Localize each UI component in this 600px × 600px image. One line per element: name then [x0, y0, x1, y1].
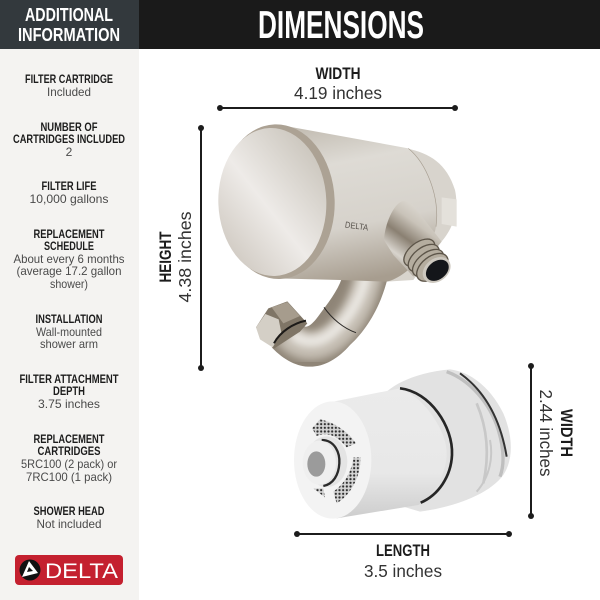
outlet: [384, 201, 442, 277]
spec: number of cartridges: [13, 120, 125, 159]
main cylinder: [333, 388, 447, 518]
dimension: height: 4.38 inches: [175, 211, 195, 302]
end face: [294, 401, 371, 519]
brand mark: DELTA: [344, 219, 369, 233]
sidebar heading: ADDITIONAL: [25, 5, 113, 25]
panel: additional information sidebar: [0, 0, 139, 600]
spec: replacement schedule: REPLACEMENT: [34, 227, 105, 241]
dimension: height: [157, 125, 204, 371]
spec: installation: [36, 312, 102, 351]
spec: number of cartridges: CARTRIDGES INCLUDED: [13, 132, 125, 146]
spec: replacement schedule: shower): [50, 277, 88, 291]
spec: filter life: [30, 179, 108, 206]
spec: replacement schedule: (average 17.2 gallon: [16, 264, 122, 278]
spec: filter attachment depth: FILTER ATTACHMENT: [20, 372, 119, 386]
nut: [256, 301, 307, 349]
product: filter cartridge: [294, 369, 511, 519]
o-ring: [400, 388, 452, 503]
title bar: dimensions: DIMENSIONS: [258, 4, 424, 47]
spec: installation: shower arm: [40, 337, 98, 351]
dimension: cartridge length: [294, 531, 512, 581]
spec: shower head: [34, 504, 105, 531]
perforated inlets: [312, 419, 361, 503]
sidebar heading: INFORMATION: [18, 25, 120, 45]
spec: filter attachment depth: [20, 372, 119, 411]
spec: filter cartridge: FILTER CARTRIDGE: [25, 72, 113, 86]
spec: replacement cartridges: REPLACEMENT: [34, 432, 105, 446]
center spout: [306, 436, 347, 487]
threads: [399, 234, 453, 287]
arm: [272, 280, 387, 367]
dimension: top width: WIDTH: [316, 65, 360, 83]
dimension: top width: 4.19 inches: [294, 83, 382, 103]
spec: replacement schedule: SCHEDULE: [44, 239, 94, 253]
dimension: cartridge width: 2.44 inches: [536, 390, 556, 477]
spec: replacement schedule: About every 6 months: [14, 252, 124, 266]
spec: number of cartridges: 2: [66, 145, 73, 159]
sidebar heading: [0, 0, 139, 49]
cap: [387, 148, 456, 282]
face: [216, 126, 329, 278]
spec: shower head: Not included: [36, 517, 102, 531]
dimension: cartridge length: 3.5 inches: [364, 561, 442, 581]
spec: filter cartridge: Included: [47, 85, 91, 99]
dimension: cartridge length: LENGTH: [376, 542, 430, 560]
outlet opening: [418, 252, 456, 288]
dimension: cartridge width: WIDTH: [557, 409, 575, 457]
spec: number of cartridges: NUMBER OF: [40, 120, 98, 134]
rim: [217, 122, 337, 281]
product: shower filter: [216, 122, 457, 377]
spec: replacement cartridges: 5RC100 (2 pack) or: [21, 457, 117, 471]
dimension: top width: [217, 65, 458, 111]
logo: Delta: DELTA: [45, 560, 118, 583]
spec: installation: Wall-mounted: [36, 325, 102, 339]
spec: filter attachment depth: 3.75 inches: [38, 397, 100, 411]
spec: replacement cartridges: 7RC100 (1 pack): [26, 470, 112, 484]
dimension: cartridge width: [528, 363, 575, 519]
spec: filter life: 10,000 gallons: [30, 192, 108, 206]
spec: installation: INSTALLATION: [36, 312, 102, 326]
logo: Delta: [15, 555, 123, 585]
spec: filter life: FILTER LIFE: [42, 179, 96, 193]
rear collar: [387, 369, 511, 512]
spec: replacement schedule: [14, 227, 124, 291]
spec: shower head: SHOWER HEAD: [34, 504, 105, 518]
spec: replacement cartridges: [21, 432, 117, 484]
title bar: dimensions: [139, 0, 600, 49]
spec: replacement cartridges: CARTRIDGES: [38, 444, 100, 458]
dimension: height: HEIGHT: [157, 232, 175, 282]
body: [277, 125, 437, 282]
spec: filter cartridge: [25, 72, 113, 99]
spec: filter attachment depth: DEPTH: [53, 384, 85, 398]
